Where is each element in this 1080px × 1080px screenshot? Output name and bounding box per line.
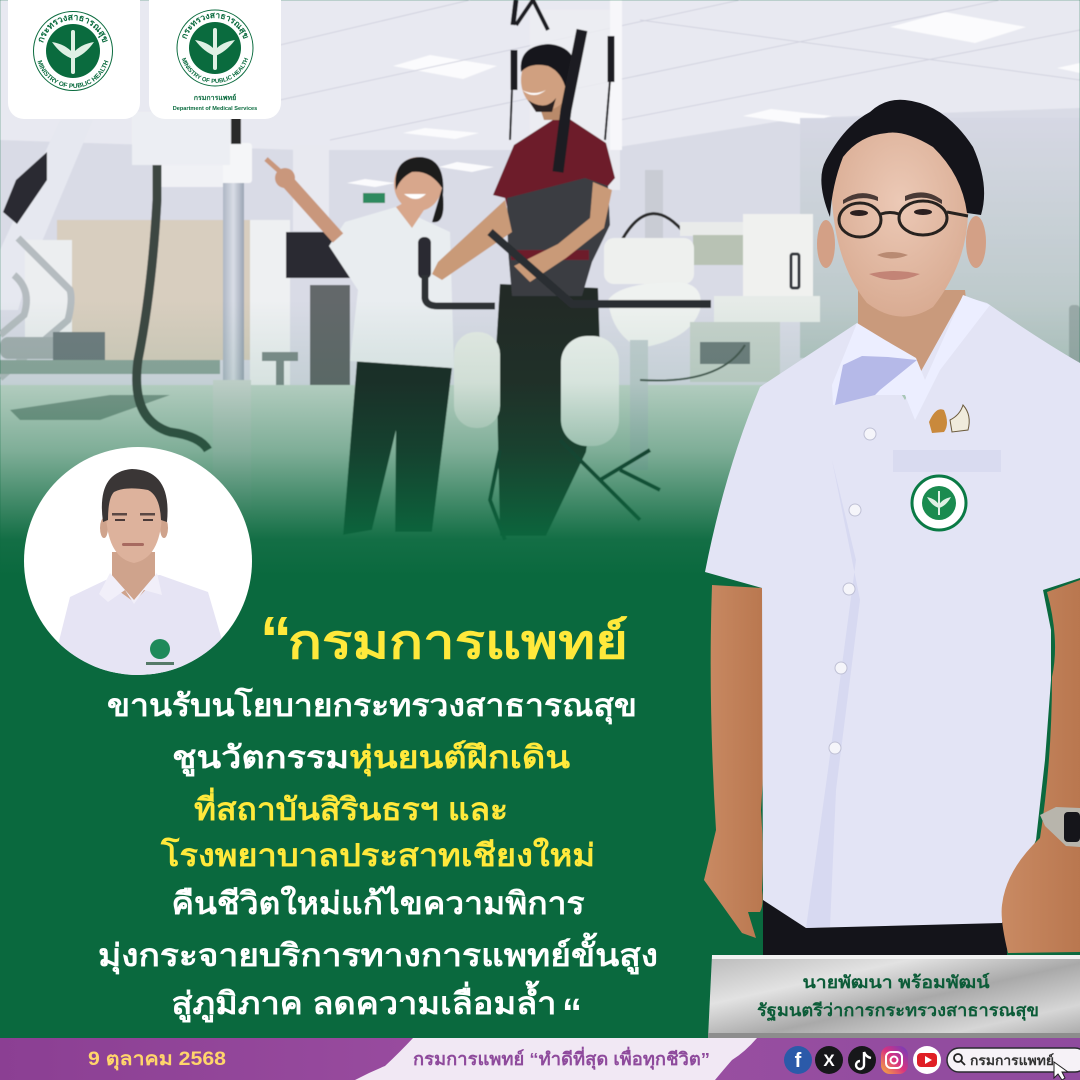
logo card: Department of Medical Services <box>149 0 281 119</box>
logo card: Ministry of Public Health: กระทรวงสาธารณสุข <box>38 14 108 43</box>
right arm and hand <box>1002 580 1080 953</box>
quote heading: กรมการแพทย์ <box>288 615 628 668</box>
lift pillar <box>223 180 244 380</box>
lapel pins <box>929 405 969 433</box>
lift head <box>220 143 252 183</box>
quote body text: มุ่งกระจายบริการทางการแพทย์ขั้นสูง <box>98 932 658 975</box>
photo background: rehabilitation room <box>0 0 1080 600</box>
eyebrows and nose <box>843 192 942 258</box>
robot right unit <box>604 214 820 470</box>
stool <box>252 352 306 403</box>
left arm <box>704 585 764 938</box>
quote body text: ชูนวัตกรรม หุ่นยนต์ฝึกเดิน <box>172 740 570 777</box>
social icons <box>784 1046 1080 1080</box>
ceiling <box>0 0 1080 150</box>
shirt shading <box>806 460 860 928</box>
quote body text: สู่ภูมิภาค ลดความเลื่อมล้ำ <box>172 980 556 1023</box>
icon: YouTube <box>913 1046 941 1074</box>
footer band <box>0 1038 1080 1080</box>
ears <box>817 216 986 268</box>
woman physiotherapist <box>266 157 495 535</box>
logo card: Department of Medical Services: MINISTRY OF PUBLIC HEALTH <box>182 58 248 83</box>
hair <box>821 100 984 217</box>
quote body text: โรงพยาบาลประสาทเชียงใหม่ <box>160 837 595 873</box>
floor <box>0 385 1080 600</box>
green panel <box>0 574 1080 1044</box>
shirt badge <box>912 476 966 530</box>
hose <box>137 165 208 450</box>
minister name plate <box>708 955 1080 1038</box>
quote heading: “ <box>260 603 292 675</box>
beige cabinets <box>57 220 253 360</box>
patient in robot harness <box>432 0 711 536</box>
icon: X <box>815 1046 843 1074</box>
quote body text: ที่สถาบันสิรินธรฯ และ <box>194 787 508 827</box>
minister name plate: นายพัฒนา พร้อมพัฒน์ <box>802 972 990 992</box>
icon: TikTok <box>848 1046 876 1074</box>
glasses <box>839 201 968 237</box>
side wall <box>800 118 1080 358</box>
logo card: Department of Medical Services: กระทรวงสาธารณสุข <box>182 12 248 39</box>
icon: X: X <box>823 1051 835 1070</box>
icon: facebook: f <box>795 1050 802 1072</box>
rails <box>0 238 71 378</box>
icon: facebook <box>784 1046 812 1074</box>
portrait circle: director <box>24 447 252 680</box>
shirt <box>705 296 1080 928</box>
trousers <box>763 900 1007 956</box>
left arch frame <box>0 120 93 310</box>
green gradient overlay <box>0 300 1080 575</box>
white cart <box>25 240 72 340</box>
minister portrait <box>704 100 1080 956</box>
wristwatch <box>1040 807 1080 847</box>
search pill: กรมการแพทย์ <box>970 1053 1054 1068</box>
minister name plate: รัฐมนตรีว่าการกระทรวงสาธารณสุข <box>757 1000 1039 1022</box>
buttons <box>829 428 876 754</box>
bed <box>0 337 72 359</box>
quote body text: คืนชีวิตใหม่แก้ไขความพิการ <box>172 885 585 921</box>
logo card: Ministry of Public Health: MINISTRY OF PUBLIC HEALTH <box>38 60 108 88</box>
ceiling lights <box>347 12 1080 187</box>
building pillar <box>293 146 329 231</box>
quote body text <box>98 687 658 1035</box>
robot leg pads <box>454 332 660 540</box>
ceiling seams <box>280 0 1080 140</box>
footer band: 9 ตุลาคม 2568 <box>88 1049 226 1071</box>
face <box>832 125 968 317</box>
logo card: Ministry of Public Health <box>8 0 140 119</box>
exit sign <box>363 193 385 203</box>
back wall equipment <box>250 220 290 410</box>
neck <box>858 290 970 400</box>
quote body text: ขานรับนโยบายกระทรวงสาธารณสุข <box>107 687 637 725</box>
right wall chair <box>1069 305 1080 365</box>
logo card: Department of Medical Services: กรมการแพทย์ <box>194 93 236 102</box>
collar <box>832 295 990 420</box>
lift straps <box>510 0 611 172</box>
icon: Instagram <box>881 1046 908 1074</box>
left dark screen <box>3 152 47 224</box>
footer band: กรมการแพทย์ “ทำดีที่สุด เพื่อทุกชีวิต” <box>413 1046 710 1070</box>
eyes and mouth <box>850 209 932 280</box>
logo card: Department of Medical Services: Department of Medical Services <box>173 106 257 112</box>
search pill <box>947 1048 1080 1080</box>
pocket <box>893 450 1001 472</box>
back pole <box>645 170 663 240</box>
quote heading <box>260 603 628 675</box>
ceiling frame near man <box>530 10 620 190</box>
quote body text: “ <box>562 991 582 1035</box>
